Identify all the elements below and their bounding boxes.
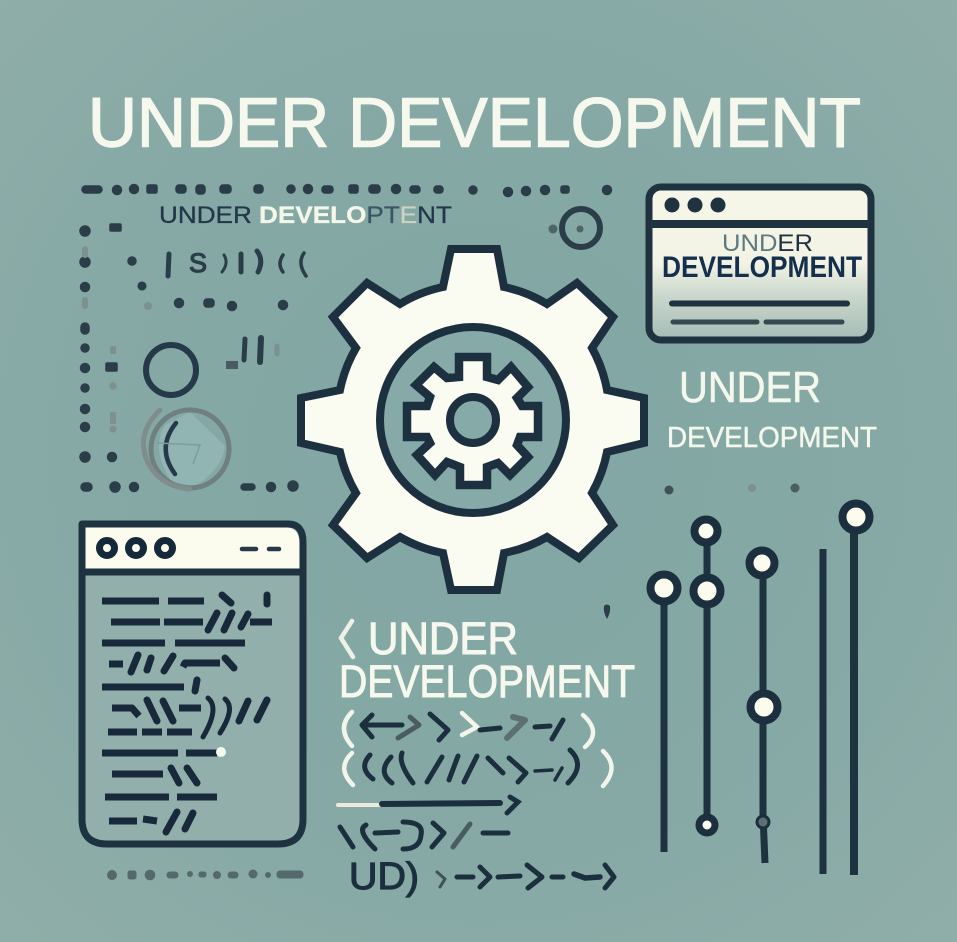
heading: under: UNDER [368,613,518,664]
window body [649,187,871,340]
code symbols row 5 [437,865,614,888]
bracket before heading [341,621,353,657]
window content lines [672,304,847,322]
panel: lower left code window [82,524,303,844]
code symbols row 3 [338,797,518,813]
squiggle row [168,251,306,276]
dotted row under code window [108,870,303,880]
icon: central gear [301,249,644,590]
panel: code snippet block [338,613,635,898]
code window body [82,524,303,844]
window divider [649,220,871,228]
code symbols row 4 [340,822,508,849]
right label: under: UNDER [679,363,821,412]
title: UNDER DEVELOPMENT [88,84,861,162]
code row 5 label: UD) [349,856,419,898]
gear inner hub [380,327,566,513]
gear center hole [450,397,496,443]
squiggle letter: S [189,248,207,278]
icon: target ring [548,209,600,247]
cream brackets [344,712,612,786]
icon: grey swirl ring [143,410,229,489]
code symbols row 2 [365,750,578,783]
code window dots [100,540,172,556]
panel: sliders [650,484,870,875]
outer gear [301,249,644,590]
heading: development: DEVELOPMENT [339,656,635,707]
panel: top right browser window [649,187,871,340]
icon: small dark ring [146,345,196,395]
right label: development: DEVELOPMENT [667,422,877,454]
window heading bold: DEVELOPMENT [662,251,862,284]
slider 3 [750,550,778,863]
code window header [86,528,300,568]
panel: dotted frame sketch [80,184,612,492]
drop mark [604,604,610,619]
slider 5 [842,504,870,875]
slider dots [664,484,800,494]
code window dashes [242,547,279,551]
code symbols row 1 [362,714,563,740]
sketch caption: UNDER DEVELO PTENT [159,202,452,229]
window dots [664,198,726,212]
code highlight dot [216,747,226,757]
dashes beside ring [226,338,277,369]
slider 1 [650,574,678,852]
slider 4 [820,549,826,874]
inner gear [407,357,538,485]
code lines [102,595,272,832]
code window divider [82,568,303,576]
window heading small: UNDER [722,230,813,257]
dotted frame [80,184,612,492]
slider 2 [694,520,720,833]
